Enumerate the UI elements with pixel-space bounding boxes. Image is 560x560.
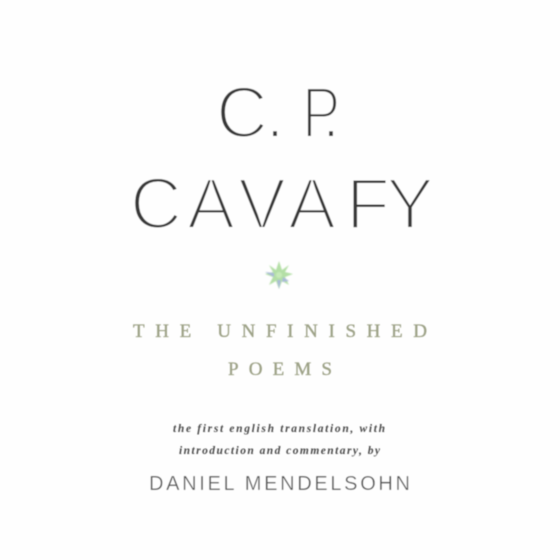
description line 2: introduction and commentary, by (179, 445, 381, 457)
author name: CAVAFY: A (288, 164, 336, 244)
author name: CAVAFY: Y (386, 164, 434, 244)
description line 1: the first english translation, with (173, 423, 385, 435)
author name: C. P.: . (265, 74, 285, 154)
author name: C. P. (216, 72, 341, 154)
author name: C. P.: C (216, 74, 268, 154)
author name: C. P.: . (321, 74, 341, 154)
subtitle line 1: THE UNFINISHED (133, 321, 427, 342)
author name: CAVAFY: V (238, 164, 286, 244)
author name: CAVAFY: F (346, 164, 390, 244)
author name: CAVAFY (130, 164, 434, 244)
subtitle line 2: POEMS (228, 359, 332, 380)
translator name: DANIEL MENDELSOHN (149, 473, 410, 495)
author name: CAVAFY: A (187, 164, 235, 244)
icon: green star ornament (265, 261, 293, 289)
author name: CAVAFY: C (130, 164, 182, 244)
author name: C. P.: P (302, 72, 340, 153)
